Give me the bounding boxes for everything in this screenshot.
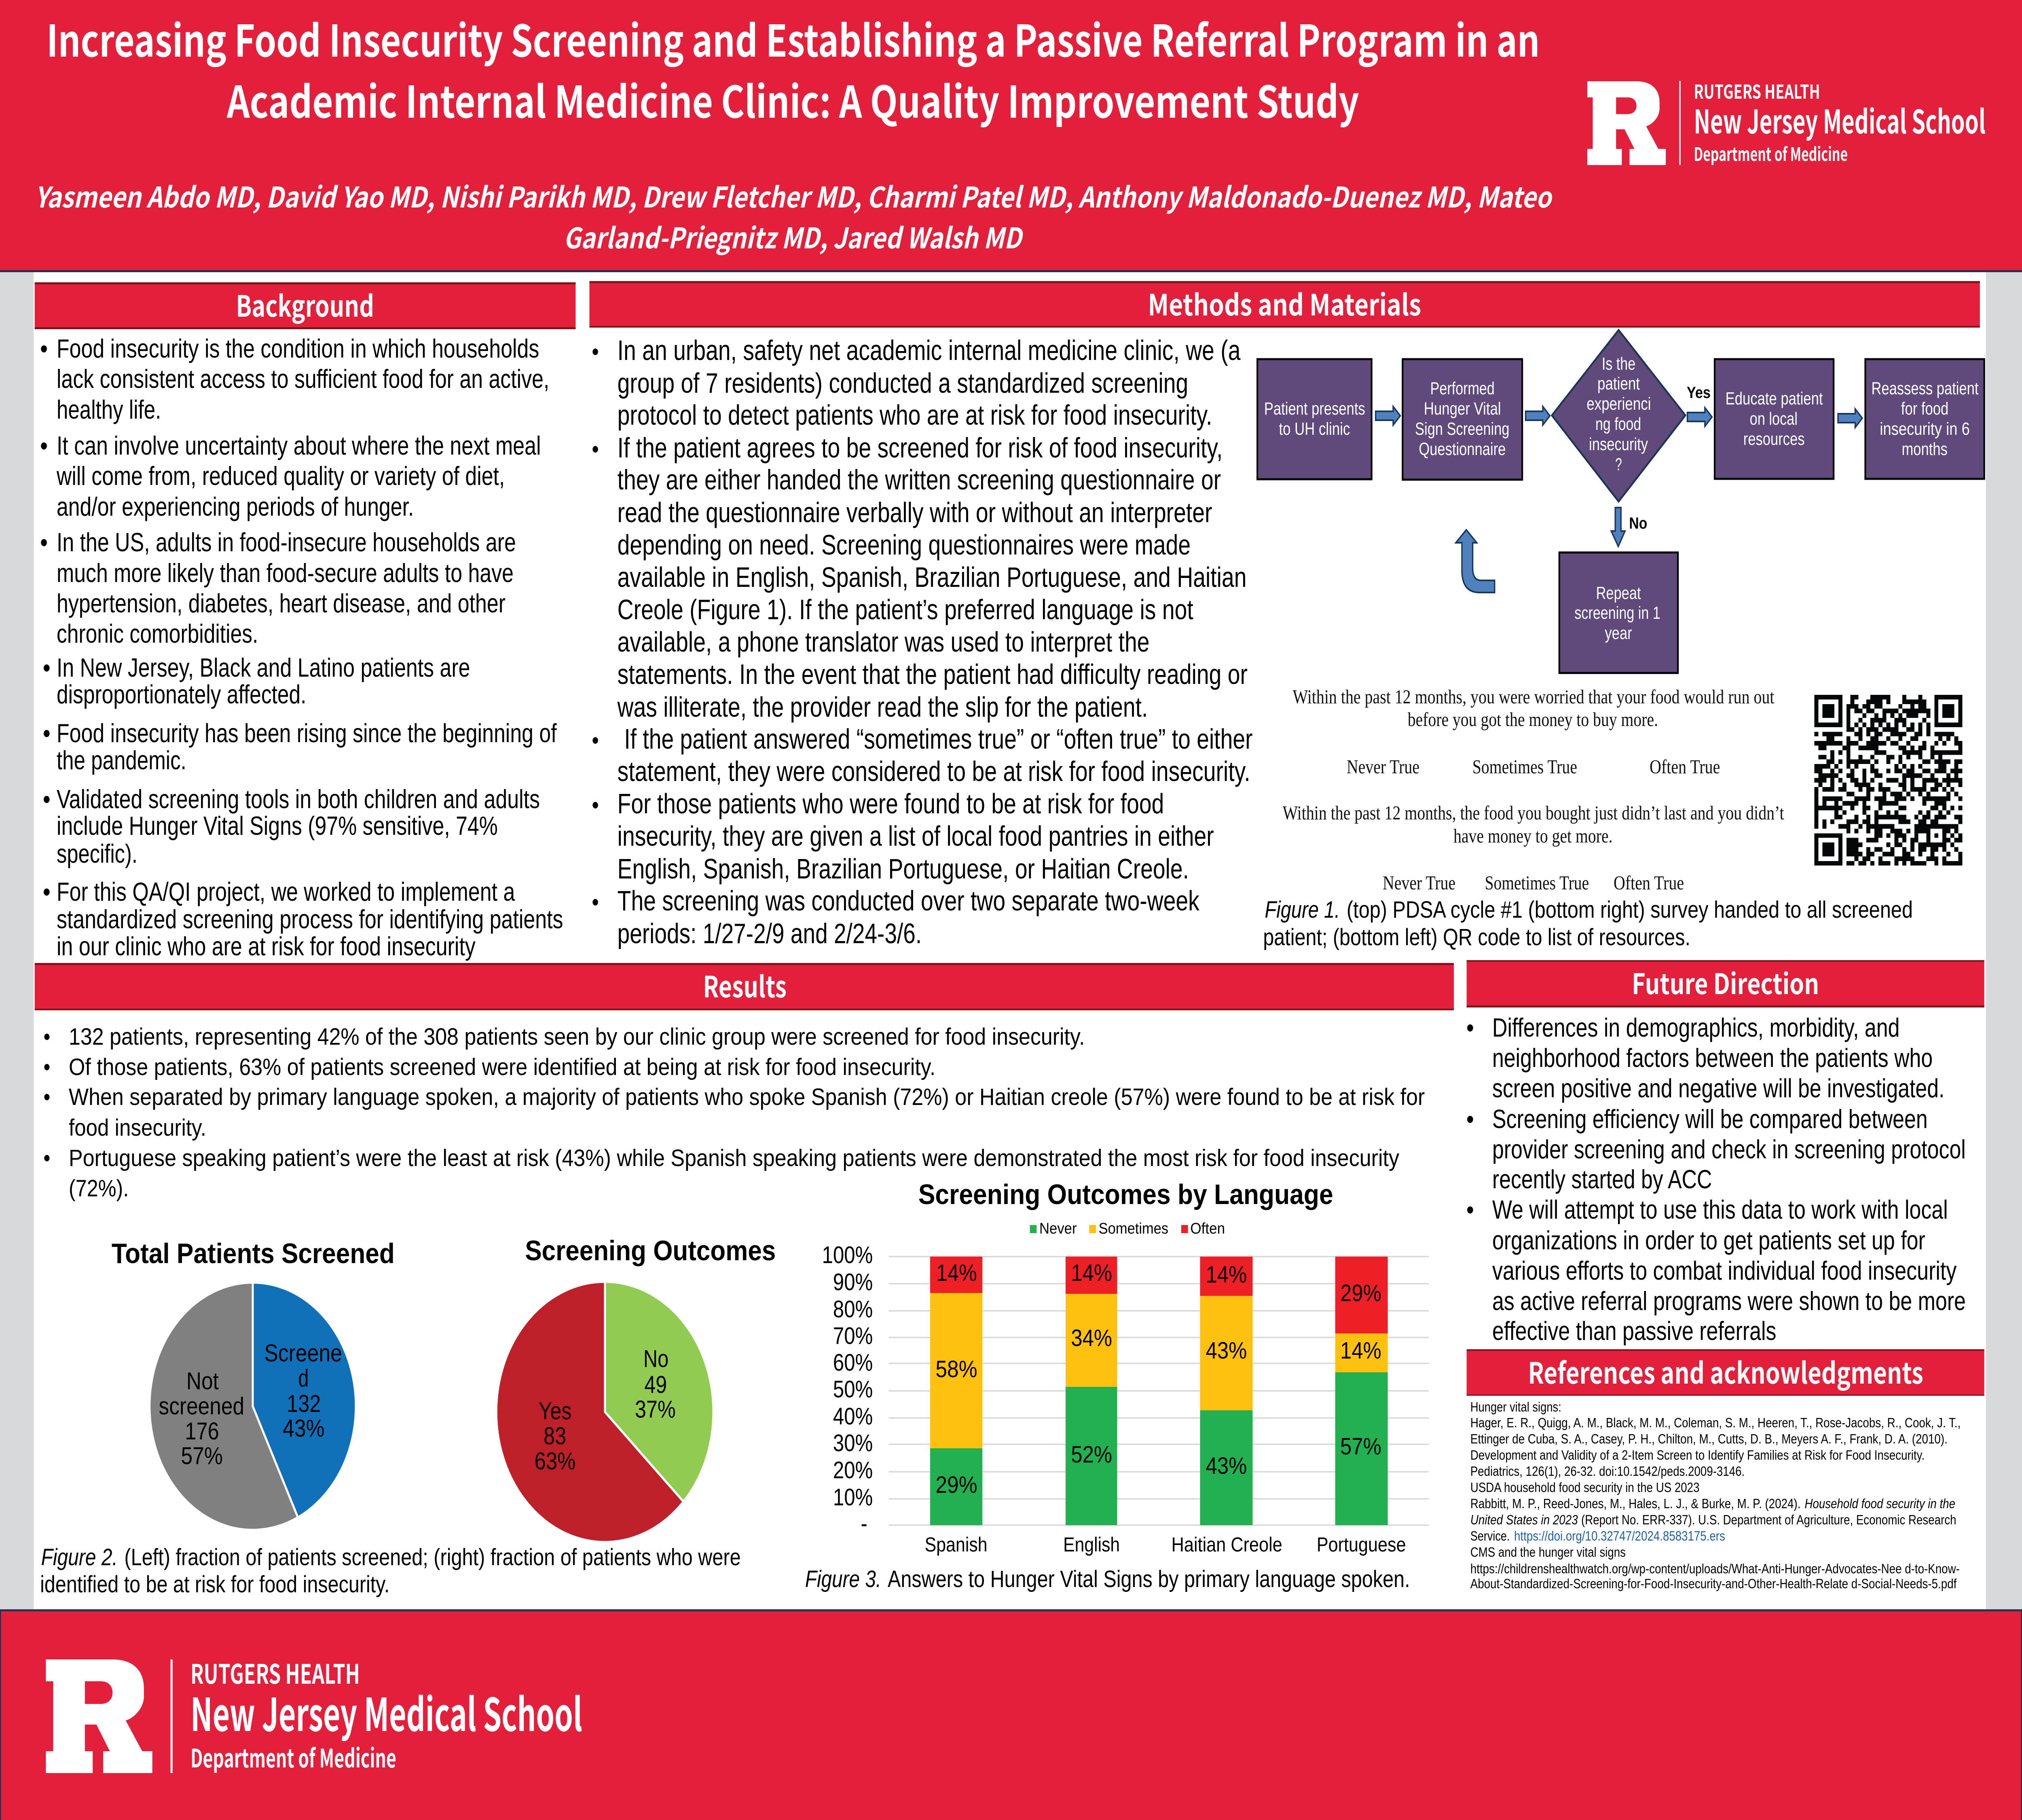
flow decision diamond: Is the — [1602, 353, 1635, 374]
caption: figure 2: (Left) fraction of patients screened; (right) fraction of patients who were — [125, 1545, 741, 1570]
text block: references: Household food security in the — [1804, 1497, 1955, 1511]
text block: methods bullets: available, a phone translator was used to interpret the — [618, 626, 1149, 658]
text block: methods bullets: was illiterate, the provider read the slip for the patient. — [617, 691, 1148, 723]
survey questions — [1283, 686, 1784, 894]
data labels: screened — [159, 1393, 244, 1420]
header banner — [0, 0, 2022, 272]
caption: figure 1 — [1263, 897, 1913, 950]
flow decision diamond: experienci — [1586, 394, 1651, 414]
data labels: 63% — [535, 1448, 575, 1475]
logo: footer Rutgers Health New Jersey Medical School — [46, 1653, 582, 1775]
text block: results bullets: food insecurity. — [69, 1115, 206, 1141]
arrow: no — [1611, 508, 1625, 546]
heading: methods and materials: Methods and Materials — [1148, 282, 1421, 324]
data labels — [535, 1345, 676, 1475]
chart: screening outcomes by language stacked bars — [822, 1179, 1429, 1556]
survey questions: Sometimes True — [1472, 756, 1577, 778]
flow decision diamond: ? — [1615, 454, 1622, 474]
x axis labels: Haitian Creole — [1172, 1533, 1282, 1556]
y axis and gridlines: 50% — [833, 1376, 873, 1403]
text block: background bullets: lack consistent access to sufficient food for an active, — [57, 364, 549, 394]
data labels: 37% — [635, 1396, 676, 1423]
authors — [35, 175, 1553, 257]
bar: Spanish: 29% — [935, 1472, 977, 1498]
bar: Portuguese: 14% — [1340, 1338, 1381, 1364]
text block: methods bullets: The screening was conducted over two separate two-week — [618, 885, 1200, 916]
data labels: Screene — [264, 1340, 342, 1367]
text block: background bullets: Validated screening tools in both children and adults — [57, 784, 540, 814]
flow box: hunger vital sign questionnaire — [1402, 359, 1522, 480]
bar: Spanish: 58% — [935, 1357, 977, 1382]
legend: Sometimes — [1099, 1220, 1168, 1237]
logo: footer Rutgers Health New Jersey Medical School: New Jersey Medical School — [190, 1678, 582, 1744]
text block: methods bullets: For those patients who were found to be at risk for food — [618, 788, 1164, 819]
text block: references: About-Standardized-Screening-for-Food-Insecurity-and-Other-Health-Relate d-Social-Needs-5.pdf — [1470, 1577, 1957, 1591]
text block: references: Ettinger de Cuba, S. A., Casey, P. H., Chilton, M., Cutts, D. B., Meyers A. F., Frank, D. A. (2010). — [1470, 1432, 1948, 1447]
text block: future direction bullets: effective than passive referrals — [1492, 1316, 1777, 1346]
text block: references: Rabbitt, M. P., Reed-Jones, M., Hales, L. J., & Burke, M. P. (2024). — [1470, 1497, 1801, 1511]
data labels: 49 — [644, 1371, 667, 1398]
flow box: reassess patient: for food — [1901, 398, 1948, 419]
text block: references: https://childrenshealthwatch.org/wp-content/uploads/What-Anti-Hunger-Advocates-Nee d-to-Know- — [1470, 1562, 1960, 1577]
text block: methods bullets: English, Spanish, Brazilian Portuguese, or Haitian Creole. — [618, 853, 1189, 885]
caption: figure 3: Figure 3. — [805, 1566, 881, 1592]
label: yes: Yes — [1687, 383, 1711, 402]
text block: references: United States in 2023 — [1470, 1513, 1578, 1528]
survey questions: before you got the money to buy more. — [1408, 709, 1658, 730]
text block: background bullets: the pandemic. — [57, 745, 186, 775]
bar: English — [1066, 1257, 1117, 1525]
bar: Haitian Creole: 43% — [1206, 1338, 1247, 1364]
data labels: Yes — [539, 1397, 571, 1424]
text block: future direction bullets: neighborhood factors between the patients who — [1492, 1043, 1933, 1073]
survey questions: Often True — [1650, 756, 1720, 778]
legend — [1030, 1220, 1225, 1237]
text block: methods bullets: If the patient agrees to be screened for risk of food insecurity, — [618, 432, 1223, 463]
flow box: educate patient: Educate patient — [1726, 388, 1823, 408]
text block: references: Hager, E. R., Quigg, A. M., Black, M. M., Coleman, S. M., Heeren, T., Rose-Jacobs, R., Cook, J. T., — [1470, 1416, 1961, 1431]
heading: future direction — [1467, 960, 1984, 1007]
survey questions: Within the past 12 months, you were worried that your food would run out — [1293, 686, 1775, 708]
bar: Portuguese: 57% — [1340, 1434, 1381, 1460]
text block: background bullets: In the US, adults in food-insecure households are — [57, 527, 516, 557]
flow box: reassess patient: Reassess patient — [1872, 378, 1979, 398]
y axis and gridlines: 20% — [833, 1457, 873, 1484]
y axis and gridlines: 80% — [833, 1296, 873, 1323]
flow box: educate patient: on local — [1750, 408, 1798, 429]
text block: future direction bullets: Screening efficiency will be compared between — [1492, 1104, 1928, 1134]
logo: footer Rutgers Health New Jersey Medical School: Department of Medicine — [190, 1738, 396, 1775]
text block: background bullets: hypertension, diabetes, heart disease, and other — [57, 588, 506, 618]
chart: screening outcomes pie — [496, 1235, 776, 1542]
panel: future direction — [1466, 960, 1984, 1346]
caption: figure 2: Figure 2. — [41, 1545, 118, 1570]
bar: Haitian Creole: 14% — [1206, 1262, 1247, 1288]
y axis and gridlines: - — [861, 1510, 867, 1537]
data labels: 176 — [185, 1418, 219, 1445]
text block: background bullets: For this QA/QI project, we worked to implement a — [57, 877, 515, 906]
bar: Haitian Creole — [1200, 1257, 1253, 1525]
text block: methods bullets: read the questionnaire verbally with or without an interpreter — [618, 497, 1212, 528]
caption: figure 1: Figure 1. — [1265, 897, 1340, 923]
caption: figure 1: (top) PDSA cycle #1 (bottom right) survey handed to all screened — [1347, 897, 1913, 923]
text block: results bullets: (72%). — [69, 1176, 129, 1202]
title — [47, 6, 1540, 131]
text block: references: (Report No. ERR-337). U.S. Department of Agriculture, Economic Research — [1581, 1513, 1956, 1528]
survey questions: Often True — [1614, 872, 1684, 894]
text block: background bullets: Food insecurity has been rising since the beginning of — [57, 718, 557, 748]
panel: results — [35, 963, 1454, 1598]
text block: future direction bullets: We will attempt to use this data to work with local — [1492, 1195, 1948, 1224]
text block: background bullets: include Hunger Vital Signs (97% sensitive, 74% — [57, 811, 498, 840]
text block: background bullets: chronic comorbidities. — [57, 619, 258, 648]
text block: future direction bullets: • — [1466, 1013, 1474, 1042]
heading: background — [35, 282, 575, 329]
text block: methods bullets: • — [592, 436, 599, 463]
caption: figure 2 — [40, 1545, 741, 1598]
y axis and gridlines: 90% — [833, 1269, 873, 1295]
heading: results — [35, 963, 1454, 1010]
caption: figure 1: patient; (bottom left) QR code to list of resources. — [1263, 925, 1690, 950]
caption: figure 3: Answers to Hunger Vital Signs by primary language spoken. — [888, 1566, 1410, 1592]
data labels: d — [298, 1365, 309, 1392]
flow box: repeat screening — [1559, 552, 1678, 673]
text block: background bullets: in our clinic who are at risk for food insecurity — [57, 931, 476, 961]
flow box: hunger vital sign questionnaire: Performed — [1430, 378, 1495, 398]
text block: references: CMS and the hunger vital signs — [1470, 1545, 1626, 1560]
data labels: 57% — [181, 1442, 223, 1469]
text block: background bullets: • — [43, 653, 51, 682]
text block: future direction bullets — [1466, 1013, 1966, 1346]
text block: references: Development and Validity of a 2-Item Screen to Identify Families at Risk for Food Insecurity. — [1470, 1448, 1925, 1463]
text block: background bullets: much more likely than food-secure adults to have — [57, 558, 514, 588]
bar: Spanish — [930, 1257, 982, 1525]
y axis and gridlines: 30% — [833, 1430, 873, 1456]
y axis and gridlines: 10% — [833, 1484, 873, 1511]
data labels: No — [643, 1345, 668, 1372]
y axis and gridlines: 100% — [822, 1242, 873, 1268]
arrow: yes — [1687, 408, 1712, 426]
text block: future direction bullets: organizations in order to get patients set up for — [1492, 1225, 1925, 1255]
data labels: 43% — [283, 1415, 325, 1442]
text block: methods bullets: protocol to detect patients who are at risk for food insecurity. — [618, 399, 1212, 431]
flowchart: PDSA cycle — [1257, 330, 1984, 673]
logo: Rutgers Health New Jersey Medical School: Department of Medicine — [1694, 140, 1848, 167]
text block: methods bullets: If the patient answered “sometimes true” or “often true” to either — [624, 723, 1253, 755]
flow decision diamond — [1552, 330, 1686, 502]
authors: Garland-Priegnitz MD, Jared Walsh MD — [563, 216, 1024, 257]
text block: background bullets: Food insecurity is the condition in which households — [57, 334, 539, 363]
chart title: Screening Outcomes by Language — [918, 1179, 1333, 1210]
text block: results bullets: 132 patients, representing 42% of the 308 patients seen by our clinic group were screened for food insecurity. — [69, 1024, 1085, 1050]
label: no: No — [1629, 514, 1647, 532]
text block: future direction bullets: recently started by ACC — [1492, 1164, 1712, 1194]
data labels: 83 — [544, 1422, 566, 1450]
text block: results bullets: • — [44, 1024, 50, 1050]
flow box: repeat screening: year — [1605, 623, 1632, 643]
title: Increasing Food Insecurity Screening and Establishing a Passive Referral Program in an — [47, 6, 1540, 70]
text block: background bullets: It can involve uncertainty about where the next meal — [57, 431, 541, 460]
flow box: reassess patient: insecurity in 6 — [1880, 419, 1970, 439]
icon: QR code — [1815, 695, 1963, 866]
text block: methods bullets: they are either handed the written screening questionnaire or — [618, 464, 1221, 495]
bar: Portuguese: 29% — [1340, 1280, 1381, 1306]
survey questions: Never True — [1347, 756, 1419, 778]
text block: methods bullets: • — [592, 338, 599, 365]
bar: Portuguese — [1335, 1257, 1388, 1525]
flow box: patient presents — [1257, 359, 1372, 479]
survey questions: have money to get more. — [1453, 825, 1613, 847]
flow box: educate patient: resources — [1743, 429, 1805, 449]
text block: references: Pediatrics, 126(1), 26-32. doi:10.1542/peds.2009-3146. — [1470, 1464, 1745, 1479]
heading: references: References and acknowledgments — [1528, 1350, 1923, 1393]
heading: methods and materials — [590, 281, 1980, 328]
flow box: hunger vital sign questionnaire: Sign Screening — [1415, 419, 1509, 439]
text block: references — [1470, 1400, 1961, 1591]
heading: future direction: Future Direction — [1632, 961, 1819, 1003]
text block: methods bullets: periods: 1/27-2/9 and 2/24-3/6. — [618, 918, 922, 949]
arrow: return loop — [1456, 530, 1495, 593]
text block: methods bullets: • — [592, 791, 599, 819]
bar: English: 52% — [1071, 1442, 1112, 1468]
chart title: Screening Outcomes — [525, 1235, 776, 1266]
pie slices — [496, 1282, 713, 1542]
text block: future direction bullets: screen positive and negative will be investigated. — [1492, 1073, 1944, 1103]
panel: methods and materials — [590, 281, 1984, 950]
text block: background bullets: In New Jersey, Black and Latino patients are — [57, 653, 470, 682]
text block: methods bullets: insecurity, they are given a list of local food pantries in either — [618, 820, 1214, 852]
text block: future direction bullets: various efforts to combat individual food insecurity — [1492, 1256, 1956, 1285]
text block: results bullets: • — [44, 1084, 50, 1110]
text block: references: https://doi.org/10.32747/2024.8583175.ers — [1514, 1529, 1725, 1544]
flow box: patient presents: Patient presents — [1264, 398, 1365, 419]
flow decision diamond: insecurity — [1589, 434, 1648, 454]
text block: methods bullets: group of 7 residents) conducted a standardized screening — [618, 367, 1188, 399]
legend: Never — [1039, 1220, 1077, 1237]
text block: methods bullets: • — [592, 889, 599, 916]
text block: methods bullets: • — [592, 727, 599, 754]
text block: methods bullets — [592, 334, 1253, 949]
bar: English: 14% — [1071, 1260, 1112, 1286]
arrow — [1525, 406, 1550, 425]
text block: background bullets: • — [43, 784, 51, 814]
flow box: reassess patient — [1865, 359, 1984, 479]
x axis labels — [925, 1533, 1406, 1556]
text block: background bullets: disproportionately affected. — [57, 679, 307, 709]
text block: background bullets: standardized screening process for identifying patients — [57, 904, 563, 934]
bar: English: 34% — [1071, 1325, 1112, 1351]
text block: background bullets: and/or experiencing periods of hunger. — [57, 492, 414, 521]
text block: results bullets: • — [44, 1054, 50, 1080]
footer banner — [0, 1609, 2022, 1820]
text block: background bullets: • — [40, 334, 48, 363]
text block: background bullets: will come from, reduced quality or variety of diet, — [56, 461, 505, 491]
x axis labels: Portuguese — [1317, 1533, 1406, 1556]
logo: Rutgers Health New Jersey Medical School: RUTGERS HEALTH — [1694, 77, 1820, 104]
survey questions: Sometimes True — [1485, 872, 1589, 894]
text block: results bullets: Of those patients, 63% of patients screened were identified at being at risk for food insecurity. — [69, 1054, 935, 1080]
text block: results bullets: When separated by primary language spoken, a majority of patients who spoke Spanish (72%) or Haitian creole (57%) were found to be at risk for — [69, 1084, 1425, 1110]
bar: Haitian Creole: 43% — [1206, 1453, 1247, 1479]
heading: background: Background — [236, 283, 374, 326]
authors: Yasmeen Abdo MD, David Yao MD, Nishi Parikh MD, Drew Fletcher MD, Charmi Patel MD, Anthony Maldonado-Duenez MD, Mateo — [35, 175, 1553, 216]
flow box: repeat screening: Repeat — [1596, 583, 1641, 603]
text block: methods bullets: available in English, Spanish, Brazilian Portuguese, and Haitian — [618, 561, 1246, 593]
data labels: Not — [186, 1367, 219, 1395]
text block: background bullets: specific). — [57, 839, 137, 868]
data labels: 132 — [287, 1390, 321, 1417]
text block: methods bullets: In an urban, safety net academic internal medicine clinic, we (a — [618, 334, 1241, 366]
panel: background — [35, 282, 575, 961]
title: Academic Internal Medicine Clinic: A Quality Improvement Study — [226, 67, 1359, 131]
flow box: educate patient — [1715, 359, 1834, 479]
logo: footer Rutgers Health New Jersey Medical School: RUTGERS HEALTH — [190, 1653, 360, 1692]
flow box: reassess patient: months — [1902, 439, 1948, 459]
text block: future direction bullets: • — [1466, 1195, 1474, 1224]
text block: future direction bullets: • — [1466, 1104, 1474, 1134]
text block: methods bullets: statement, they were considered to be at risk for food insecurity. — [618, 756, 1250, 787]
flow box: hunger vital sign questionnaire: Hunger Vital — [1424, 398, 1501, 419]
text block: background bullets: • — [43, 877, 51, 906]
text block: future direction bullets: provider screening and check in screening protocol — [1492, 1134, 1966, 1164]
flow box: hunger vital sign questionnaire: Questionnaire — [1419, 439, 1506, 459]
text block: references: Service. — [1470, 1529, 1510, 1544]
y axis and gridlines: 40% — [833, 1403, 873, 1430]
y axis and gridlines — [822, 1242, 1429, 1537]
pie slices — [150, 1282, 356, 1530]
flow decision diamond: patient — [1597, 373, 1640, 394]
text block: background bullets: • — [40, 527, 48, 557]
text block: future direction bullets: as active referral programs were shown to be more — [1492, 1286, 1966, 1316]
caption: figure 2: identified to be at risk for food insecurity. — [40, 1572, 389, 1598]
chart: total patients screened pie — [112, 1238, 395, 1530]
heading: results: Results — [703, 964, 787, 1006]
arrow — [1376, 406, 1400, 425]
text block: methods bullets: statements. In the event that the patient had difficulty reading or — [618, 658, 1248, 690]
bar: Spanish: 14% — [936, 1260, 977, 1286]
survey questions: Within the past 12 months, the food you bought just didn’t last and you didn’t — [1283, 802, 1784, 824]
x axis labels: English — [1063, 1533, 1120, 1556]
text block: future direction bullets: Differences in demographics, morbidity, and — [1492, 1013, 1900, 1042]
chart title: Total Patients Screened — [112, 1238, 395, 1269]
text block: methods bullets: depending on need. Screening questionnaires were made — [618, 529, 1191, 561]
flow box: repeat screening: screening in 1 — [1574, 603, 1660, 623]
y axis and gridlines: 70% — [833, 1323, 873, 1349]
text block: results bullets: Portuguese speaking patient’s were the least at risk (43%) while Spanish speaking patients were demonstrated the most risk for food insecurity — [69, 1145, 1399, 1171]
text block: references: Hunger vital signs: — [1470, 1400, 1561, 1415]
text block: background bullets: healthy life. — [57, 395, 161, 424]
flow decision diamond: ng food — [1595, 414, 1641, 434]
text block: background bullets — [40, 334, 563, 961]
arrow — [1838, 409, 1862, 427]
text block: references: USDA household food security in the US 2023 — [1470, 1481, 1700, 1495]
x axis labels: Spanish — [925, 1533, 988, 1556]
text block: results bullets — [44, 1024, 1425, 1202]
text block: methods bullets: Creole (Figure 1). If the patient’s preferred language is not — [618, 594, 1193, 625]
text block: results bullets: • — [44, 1145, 50, 1171]
text block: background bullets: • — [43, 718, 51, 748]
text block: background bullets: • — [40, 431, 48, 460]
logo: Rutgers Health New Jersey Medical School — [1587, 77, 1986, 167]
flow box: patient presents: to UH clinic — [1279, 419, 1350, 439]
y axis and gridlines: 60% — [833, 1349, 873, 1376]
legend: Often — [1190, 1220, 1225, 1237]
data labels — [159, 1340, 342, 1469]
panel: references and acknowledgments — [1467, 1349, 1984, 1591]
survey questions: Never True — [1383, 872, 1455, 894]
